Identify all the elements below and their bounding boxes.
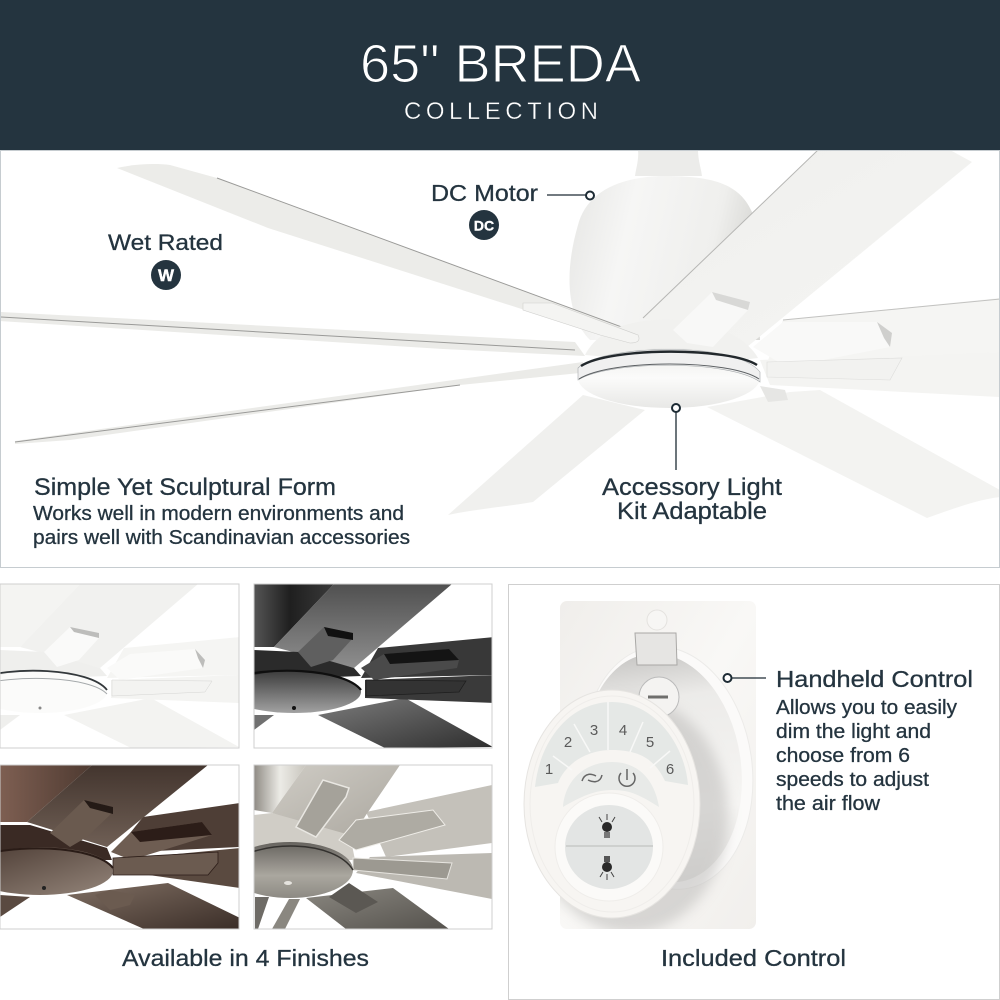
- blade: lower right: [707, 390, 1000, 518]
- blade: right lower: [760, 352, 1000, 397]
- caption: finishes: Available in 4 Finishes: [122, 945, 369, 971]
- chrome ring: [578, 349, 760, 382]
- callout: wet rated: Wet Rated: [108, 230, 223, 255]
- callout: handheld control: Allows you to easily: [776, 697, 957, 719]
- callout: handheld control: [724, 666, 973, 815]
- bracket: upper left blade: [523, 303, 639, 343]
- remote handset: [524, 690, 700, 918]
- callout: handheld control: Handheld Control: [776, 666, 973, 692]
- callout: wet rated: [108, 230, 223, 290]
- wall plate lip: [568, 635, 768, 901]
- cavity: [570, 643, 756, 893]
- callout: accessory light kit: Kit Adaptable: [617, 498, 767, 525]
- text block: sculptural form: Works well in modern environments and: [33, 503, 404, 525]
- speed buttons arc: [535, 702, 688, 787]
- text block: sculptural form: Simple Yet Sculptural Form: [34, 474, 336, 501]
- light kit plate: [580, 366, 758, 408]
- fan downrod and canopy: [635, 150, 702, 176]
- callout: accessory light kit: [602, 404, 782, 525]
- motor housing: [569, 176, 760, 340]
- panel: white finish: [0, 584, 240, 748]
- panel: main fan hero: [0, 150, 1000, 568]
- speed buttons arc: 6: [666, 761, 674, 778]
- bracket: right lower blade: [767, 358, 902, 380]
- panel: black finish: [227, 584, 494, 748]
- bracket: lower blade: [760, 386, 788, 402]
- blade: lower left: [448, 395, 645, 515]
- title: 65" BREDA: [360, 34, 641, 94]
- text block: sculptural form: [33, 474, 410, 549]
- icon: reverse arrows: [582, 774, 602, 782]
- blade: upper left: [118, 164, 619, 327]
- wall plate: [560, 601, 756, 929]
- bracket: right upper blade: [877, 322, 892, 347]
- reverse and power buttons: [563, 762, 659, 807]
- panel: brushed nickel finish: [227, 765, 492, 929]
- battery knob: [639, 677, 679, 717]
- wall plate circle: [647, 610, 667, 630]
- blade: lower far left: [15, 362, 583, 444]
- speed buttons arc: 5: [646, 734, 654, 751]
- speed buttons arc: 2: [564, 734, 572, 751]
- speed buttons arc: 1: [545, 761, 553, 778]
- panel: bronze finish: [0, 765, 240, 929]
- callout: handheld control: dim the light and: [776, 721, 931, 743]
- header banner: [0, 0, 1000, 150]
- icon: bulb up: [599, 814, 615, 838]
- clip: [635, 633, 677, 665]
- blade: top right: [710, 151, 972, 346]
- handset shadow: [560, 708, 732, 929]
- lower ring line: [579, 364, 759, 379]
- fan illustration: [0, 150, 1000, 518]
- callout: DC motor: DC Motor: [431, 180, 538, 206]
- blade: right upper: [767, 298, 1000, 363]
- callout: handheld control: the air flow: [776, 793, 881, 815]
- dark ring accent: [581, 352, 757, 366]
- blade: far left: [0, 312, 585, 356]
- icon: DC badge: [469, 210, 499, 240]
- subtitle: COLLECTION: [404, 98, 598, 125]
- icon: power: [619, 769, 635, 786]
- speed buttons arc: 3: [590, 722, 598, 739]
- text block: sculptural form: pairs well with Scandinavian accessories: [33, 527, 410, 549]
- speed buttons arc: 4: [619, 722, 627, 739]
- callout: handheld control: choose from 6: [776, 745, 910, 767]
- bracket: top right blade: [712, 292, 750, 310]
- hub body: [585, 326, 758, 359]
- icon: DC badge: DC: [474, 218, 494, 234]
- callout: handheld control: speeds to adjust: [776, 769, 929, 791]
- icon: W badge: W: [158, 266, 175, 285]
- callout: DC motor: [431, 180, 594, 240]
- callout: accessory light kit: Accessory Light: [602, 474, 782, 501]
- icon: bulb down: [600, 856, 614, 880]
- light dimmer buttons: [565, 805, 653, 889]
- caption: included control: Included Control: [661, 945, 846, 971]
- panel: handheld control: [508, 584, 1000, 1000]
